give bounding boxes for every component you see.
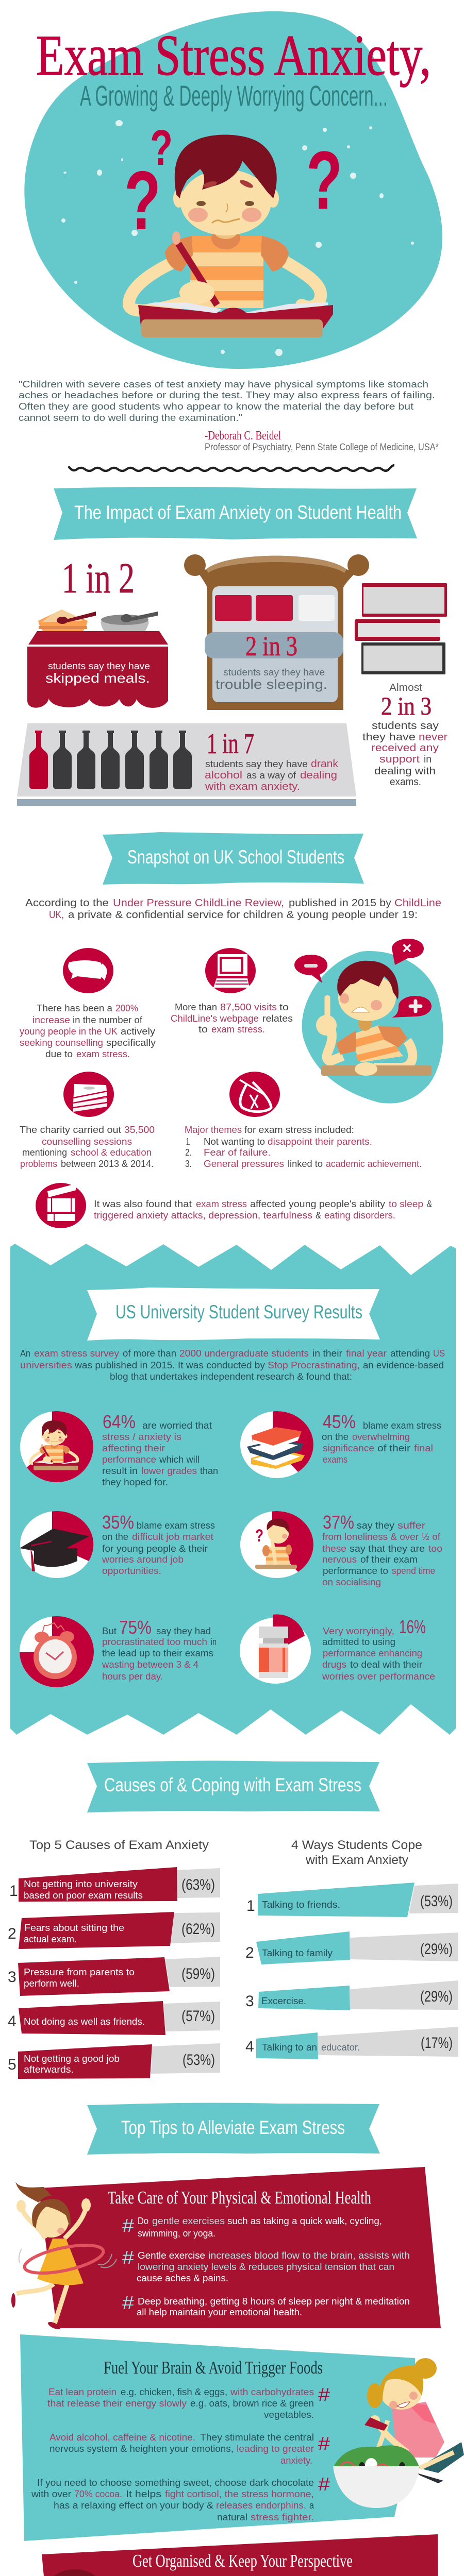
stat: 35,500 counselling sessions: The charity carried out <box>20 1125 121 1135</box>
tips text: increases blood flow to the brain, assists with <box>208 2250 410 2261</box>
coping 2: (29%) <box>420 1941 453 1958</box>
stat: 200% increase: specifically <box>106 1038 156 1048</box>
banner: snapshot on UK school students: Snapshot on UK School Students <box>127 846 344 868</box>
cause 2: Fears about sitting the <box>24 1923 124 1933</box>
tip bullets: # <box>122 2215 134 2236</box>
cause 2: actual exam. <box>24 1934 77 1944</box>
stat: 37% loneliness: suffer <box>397 1520 425 1531</box>
text: other effects of exam stress <box>94 1199 432 1221</box>
question marks: ? <box>150 120 173 176</box>
tips text: lowering anxiety levels & reduces physical tension that can <box>138 2262 394 2272</box>
icon: laptop <box>205 948 256 993</box>
cause 1: based on poor exam results <box>24 1890 143 1901</box>
illustration: girl with hula hoop <box>11 2182 117 2331</box>
stat: almost 2 in 3 no support: Almost <box>389 682 422 693</box>
coping 4 <box>245 2027 458 2059</box>
banner: causes and coping: Causes of & Coping with Exam Stress <box>104 1774 361 1795</box>
intro text: ChildLine review: a private & confidential service for children & young people under 19: <box>68 909 418 921</box>
panel: get organised <box>19 2534 439 2576</box>
stat text: 1 in 7 <box>207 728 254 760</box>
stat: 35,500 counselling sessions: between 2013 & 2014. <box>61 1159 154 1169</box>
stat: 64% worried: they hoped for. <box>102 1477 168 1487</box>
illustration: bed with trouble sleeping stat <box>184 554 369 710</box>
tips text: e.g. oats, brown rice & green <box>190 2398 314 2409</box>
illustration: stressed boy with speech bubbles <box>294 939 443 1104</box>
stat: 200% increase: seeking counselling <box>20 1038 103 1048</box>
survey intro: final year <box>346 1348 387 1359</box>
stat text: students say they have <box>205 759 308 769</box>
stat: almost 2 in 3 no support: 2 in 3 <box>381 691 432 720</box>
stat: 37% loneliness: performance to <box>323 1566 388 1576</box>
illustration: table with skipped meals stat: students say they have <box>48 661 150 671</box>
list: major themes: General pressures <box>204 1159 284 1169</box>
tips text: e.g. chicken, fish & eggs, <box>121 2387 227 2397</box>
stat: 75% procrastinated: procrastinated too much <box>102 1637 207 1647</box>
list: major themes: 2. <box>185 1147 192 1158</box>
illustration: table with skipped meals stat: skipped meals. <box>45 670 150 686</box>
list: major themes: Not wanting to <box>204 1137 265 1147</box>
list: major themes: Major themes <box>185 1125 242 1135</box>
tips text: Do <box>138 2216 148 2226</box>
survey intro: Stop Procrastinating, <box>268 1360 360 1370</box>
illustration: smiling boy pointing <box>19 2569 129 2576</box>
stat: almost 2 in 3 no support: never <box>419 732 448 743</box>
heading: top 5 causes: Top 5 Causes of Exam Anxiety <box>29 1838 209 1852</box>
intro text: ChildLine review: published in 2015 by <box>289 897 391 909</box>
illustration: bed with trouble sleeping stat: students say they have <box>223 667 325 677</box>
quote: aches or headaches before or during the test. They may also express fears of failing. <box>19 390 435 400</box>
tips text: Deep breathing, getting 8 hours of sleep per night & meditation <box>138 2296 410 2307</box>
tip bullets: # <box>318 2433 330 2454</box>
coping 4: (17%) <box>421 2035 453 2052</box>
cause 5 <box>8 2043 220 2079</box>
heading: Get Organised & Keep Your Perspective <box>132 2551 353 2571</box>
tips text: with carbohydrates <box>230 2387 314 2397</box>
stat: 87,500 visits: to <box>279 1002 289 1012</box>
stat: 200% increase: increase <box>32 1015 70 1025</box>
stat: 16% drugs: admitted to using <box>322 1637 395 1647</box>
stat: 35,500 counselling sessions: problems <box>20 1159 57 1169</box>
stat: 75% procrastinated <box>102 1617 217 1682</box>
stat: 16% drugs: worries over performance <box>322 1671 435 1682</box>
stat: 35,500 counselling sessions: counselling sessions <box>42 1137 132 1147</box>
heading: Take Care of Your Physical & Emotional Health <box>108 2188 371 2208</box>
survey intro: in their <box>312 1348 342 1359</box>
coping 3 <box>245 1980 458 2010</box>
stat: 45% blame: final <box>414 1443 433 1453</box>
list: major themes: disappoint their parents. <box>268 1137 372 1147</box>
tip bullets: # <box>122 2292 134 2313</box>
stat: 87,500 visits: More than <box>175 1002 217 1012</box>
survey intro: attending <box>390 1348 430 1359</box>
stat: 87,500 visits: 87,500 visits <box>220 1002 277 1012</box>
stat: 45% blame: blame exam stress <box>363 1420 441 1431</box>
pie: 37% with thinking boy: ? <box>255 1526 263 1546</box>
stat: 45% blame: exams <box>323 1454 347 1465</box>
stat: almost 2 in 3 no support: students say <box>372 720 439 732</box>
icon: no failure grade <box>229 1072 280 1117</box>
stat: 75% procrastinated: say they had <box>156 1626 211 1636</box>
list: major themes: linked to <box>288 1159 323 1169</box>
survey intro: an evidence-based <box>363 1360 444 1370</box>
stat: 35,500 counselling sessions: 35,500 <box>124 1125 155 1135</box>
pie: 16% with pill bottle <box>240 1614 311 1684</box>
cause 3 <box>8 1957 220 1996</box>
stat: 35,500 counselling sessions: school & education <box>71 1147 152 1158</box>
stat: 75% procrastinated: hours per day. <box>102 1671 163 1682</box>
list: major themes: for exam stress included: <box>244 1125 354 1135</box>
banner: top tips <box>87 2103 380 2155</box>
icon: books <box>36 1183 86 1228</box>
speech bubbles <box>294 939 432 1018</box>
stat: almost 2 in 3 no support: received any <box>371 742 439 754</box>
tips text: has a relaxing effect on your body & <box>54 2500 213 2511</box>
stat: 37% loneliness: these <box>322 1544 346 1554</box>
stat: 35% job market: opportunities. <box>102 1566 161 1576</box>
text: other effects of exam stress: to sleep <box>389 1199 423 1209</box>
stat: 35% job market: for young people & their <box>102 1544 208 1554</box>
banner: causes and coping <box>87 1761 380 1812</box>
stat: 200% increase: 200% <box>115 1003 138 1013</box>
tips text: all help maintain your emotional health. <box>137 2307 302 2317</box>
text: other effects of exam stress: eating disorders. <box>324 1210 395 1221</box>
stat: 200% increase: exam stress. <box>76 1049 130 1059</box>
stat: 37% loneliness: 37% <box>323 1512 354 1533</box>
survey intro: An <box>20 1348 30 1359</box>
tip bullets <box>318 2384 330 2495</box>
coping 1: (53%) <box>420 1893 453 1910</box>
tips text: a <box>309 2500 314 2511</box>
heading: Fuel Your Brain & Avoid Trigger Foods <box>104 2358 323 2378</box>
survey intro: exam stress survey <box>34 1348 119 1359</box>
stat: 35% job market: on the <box>102 1532 128 1542</box>
tips text <box>137 2216 410 2317</box>
stat: 64% worried <box>102 1411 218 1487</box>
cause 5: Not getting a good job <box>24 2054 120 2064</box>
stat: almost 2 in 3 no support: they have <box>362 732 416 743</box>
stat text: alcohol <box>205 770 242 781</box>
stat: 64% worried: result in <box>102 1466 138 1476</box>
stat: 75% procrastinated: the lead up to their exams <box>102 1648 213 1658</box>
coping 1: 1 <box>246 1897 255 1914</box>
tips text: gentle exercises <box>152 2216 225 2226</box>
tips text: 70% cocoa. <box>74 2489 122 2499</box>
stat: 200% increase <box>20 1003 156 1059</box>
stat: 200% increase: actively <box>121 1026 155 1037</box>
stat: 37% loneliness: say they <box>357 1520 394 1531</box>
stat: 16% drugs: performance enhancing <box>323 1648 422 1658</box>
stat: 75% procrastinated: But <box>102 1626 117 1636</box>
hero teal blob <box>24 11 442 369</box>
illustration: bed with trouble sleeping stat: 2 in 3 <box>245 631 297 662</box>
heading: 4 ways to cope: 4 Ways Students Cope <box>291 1838 422 1852</box>
stat: almost 2 in 3 no support: support <box>379 754 420 765</box>
cause 2: 2 <box>8 1925 16 1942</box>
stat: 87,500 visits <box>171 1002 293 1035</box>
tips text: cause aches & pains. <box>137 2273 228 2283</box>
stat: 45% blame: on the <box>322 1432 349 1442</box>
illustration: table with skipped meals stat <box>27 631 168 708</box>
pie: 45% <box>240 1411 313 1478</box>
stat: 87,500 visits: to <box>198 1024 208 1035</box>
stat: 200% increase: due to <box>45 1049 73 1059</box>
cause 3: 3 <box>8 1969 16 1986</box>
panel: physical and emotional health <box>11 2167 441 2331</box>
stat: 45% blame: of their <box>377 1443 410 1453</box>
coping 3: 3 <box>245 1993 254 2010</box>
stat: 37% loneliness: from loneliness & over ½ of <box>322 1532 441 1542</box>
banner: snapshot on UK school students <box>103 832 364 885</box>
stat: 87,500 visits: exam stress. <box>211 1024 265 1035</box>
list: major themes: 1. <box>186 1137 190 1147</box>
illustration: worried boy writing in a book <box>129 135 333 337</box>
tips text: If you need to choose something sweet, choose dark chocolate <box>37 2478 314 2488</box>
list: major themes <box>185 1125 422 1169</box>
coping 4: Talking to an <box>262 2042 317 2053</box>
text: other effects of exam stress: & <box>427 1199 432 1209</box>
bar chart: 4 ways students cope <box>245 1883 458 2059</box>
tips text: natural <box>217 2512 247 2522</box>
cause 1 <box>9 1867 220 1902</box>
survey intro: blog that undertakes independent research & found that: <box>110 1371 352 1382</box>
stat: 64% worried: lower grades <box>141 1466 197 1476</box>
coping 1 <box>246 1883 458 1917</box>
tips text: that release their energy slowly <box>47 2398 187 2409</box>
list: major themes: academic achievement. <box>326 1159 422 1169</box>
stat: 35,500 counselling sessions: mentioning <box>22 1147 67 1158</box>
intro text: ChildLine review: Under Pressure ChildLine Review, <box>113 897 284 909</box>
stat: 16% drugs: drugs <box>322 1659 346 1670</box>
stat: 37% loneliness: nervous <box>322 1554 357 1565</box>
stat: 35% job market: 35% <box>102 1512 134 1533</box>
tips text: vegetables. <box>264 2410 314 2420</box>
cause 1: (63%) <box>181 1876 215 1893</box>
tips text: Avoid alcohol, caffeine & nicotine. <box>49 2432 195 2443</box>
stat: 87,500 visits: ChildLine's webpage <box>171 1013 259 1024</box>
stat: 75% procrastinated: 75% <box>119 1617 152 1638</box>
quote: Often they are good students who appear to know the material the day before but <box>19 401 413 412</box>
stat: 64% worried: 64% <box>103 1411 136 1432</box>
stat: 37% loneliness: on socialising <box>322 1577 381 1587</box>
stat: 37% loneliness: too <box>428 1544 442 1554</box>
tips text <box>31 2387 314 2522</box>
illustration: book stack <box>355 583 447 674</box>
bottles <box>29 731 192 789</box>
tips text: such as taking a quick walk, cycling, <box>227 2216 382 2226</box>
cause 1: Not getting into university <box>24 1879 138 1889</box>
stat: 45% blame: overwhelming <box>352 1432 410 1442</box>
panel: fuel your brain <box>20 2334 464 2541</box>
survey intro: was published in 2015. It was conducted by <box>74 1360 265 1370</box>
coping 3: Excercise. <box>261 1996 306 2006</box>
tips text: Eat lean protein <box>48 2387 117 2397</box>
stat: 16% drugs: to deal with their <box>350 1659 422 1670</box>
text: other effects of exam stress: & <box>316 1210 321 1221</box>
question marks: ? <box>124 154 161 247</box>
pie: 75% with alarm clock <box>20 1616 94 1687</box>
panel: US university survey <box>10 1244 456 1735</box>
cause 5: (53%) <box>183 2052 215 2069</box>
stat: 16% drugs: 16% <box>399 1616 426 1637</box>
tip bullets: # <box>318 2473 330 2495</box>
text: other effects of exam stress: triggered anxiety attacks, depression, tearfulness <box>94 1210 312 1221</box>
stat: almost 2 in 3 no support: dealing with <box>374 766 436 777</box>
illustration: bowls <box>38 609 158 640</box>
cause 4: 4 <box>8 2013 16 2030</box>
banner: top tips: Top Tips to Alleviate Exam Stress <box>121 2117 345 2138</box>
tips text: releases endorphins, <box>216 2500 306 2511</box>
quote: cannot seem to do well during the examination." <box>19 413 242 423</box>
tips text: It helps <box>126 2489 161 2499</box>
stat: 16% drugs: Very worryingly, <box>323 1626 394 1636</box>
intro text: ChildLine review: ChildLine <box>394 897 441 909</box>
stat: 64% worried: performance <box>102 1454 156 1465</box>
list: major themes: Fear of failure. <box>204 1147 271 1158</box>
stat: 37% loneliness: spend time <box>392 1566 435 1576</box>
tips text: fight cortisol, the stress hormone, <box>165 2489 314 2499</box>
tip bullets <box>122 2215 134 2313</box>
tips text: Gentle exercise <box>138 2250 205 2261</box>
stat: almost 2 in 3 no support <box>362 682 448 788</box>
stat: 35% job market: worries around job <box>102 1554 184 1565</box>
tips text: leading to greater <box>237 2444 314 2454</box>
stat: 200% increase: There has been a <box>37 1003 113 1013</box>
coping 2: Talking to family <box>262 1948 333 1958</box>
text: other effects of exam stress: exam stress <box>196 1199 247 1209</box>
stat: 45% blame: significance <box>323 1443 374 1453</box>
cause 5: afterwards. <box>24 2064 74 2075</box>
quote <box>19 379 435 423</box>
icon: chat bubbles <box>63 948 113 993</box>
stat: 45% blame: 45% <box>323 1411 356 1432</box>
pie: 37% with thinking boy <box>240 1511 313 1578</box>
squiggle divider <box>69 465 394 471</box>
stat: 64% worried: which will <box>159 1454 200 1465</box>
survey intro: 2000 undergraduate students <box>179 1348 309 1359</box>
tips text: anxiety. <box>280 2455 312 2466</box>
question marks: ? <box>306 134 342 226</box>
cause 1: 1 <box>9 1883 18 1900</box>
icon: paper stack <box>63 1072 114 1117</box>
survey intro: US <box>433 1348 445 1359</box>
stat: 35% job market: difficult job market <box>132 1532 213 1542</box>
cause 2: (62%) <box>181 1921 215 1938</box>
banner: impact of exam anxiety <box>54 487 417 540</box>
quote attribution: -Deborah C. Beidel <box>205 429 281 443</box>
text: other effects of exam stress: affected young people's ability <box>250 1199 385 1209</box>
survey intro: universities <box>20 1360 72 1370</box>
cause 4 <box>8 2001 220 2035</box>
survey intro <box>20 1348 445 1382</box>
cause 2 <box>8 1912 220 1949</box>
illustration: stressed boy with speech bubbles: × <box>402 939 412 957</box>
tips text: stress fighter. <box>251 2512 314 2522</box>
stat: 64% worried: affecting their <box>102 1443 165 1453</box>
stat: 35% job market: blame exam stress <box>137 1520 215 1531</box>
tips text: with over <box>31 2489 71 2499</box>
banner: impact of exam anxiety: The Impact of Exam Anxiety on Student Health <box>74 502 402 523</box>
text: other effects of exam stress: It was also found that <box>94 1199 192 1209</box>
tips text: swimming, or yoga. <box>138 2228 216 2239</box>
heading: 4 ways to cope: with Exam Anxiety <box>305 1853 408 1867</box>
illustration: girl with salad bowl <box>333 2358 464 2508</box>
tip bullets: # <box>318 2384 330 2405</box>
stat: 35,500 counselling sessions <box>20 1125 155 1169</box>
stat: 75% procrastinated: in <box>211 1637 217 1647</box>
stat: almost 2 in 3 no support: in <box>424 754 432 765</box>
bar chart: top 5 causes <box>8 1867 220 2079</box>
stat: almost 2 in 3 no support: exams. <box>390 776 421 788</box>
stat: 64% worried: than <box>200 1466 218 1476</box>
cause 5: 5 <box>8 2056 16 2073</box>
pie: 35% with graduation cap <box>20 1511 93 1578</box>
stat: 64% worried: stress / anxiety is <box>102 1432 181 1442</box>
intro text: ChildLine review: According to the <box>25 897 109 909</box>
coping 2 <box>245 1931 458 1964</box>
quote: "Children with severe cases of test anxiety may have physical symptoms like stomach <box>19 379 428 389</box>
stat: 1 in 2: 1 in 2 <box>62 554 135 602</box>
stat: 45% blame <box>322 1411 441 1465</box>
stat: 37% loneliness: say that they are <box>350 1544 425 1554</box>
cause 3: Pressure from parents to <box>24 1967 135 1977</box>
stat: 37% loneliness: of their exam <box>360 1554 418 1565</box>
coping 4: educator. <box>321 2042 360 2053</box>
stat: 16% drugs <box>322 1616 435 1682</box>
stat text: with exam anxiety. <box>205 781 300 792</box>
tip bullets: # <box>122 2247 134 2268</box>
stat: 37% loneliness <box>322 1512 442 1587</box>
stat: 35% job market <box>102 1512 215 1576</box>
stat: 200% increase: young people in the UK <box>20 1026 118 1037</box>
shelf with bottles: 1 in 7 <box>17 723 356 806</box>
cause 3: perform well. <box>24 1978 79 1989</box>
stat: 87,500 visits: relates <box>262 1013 293 1024</box>
quote attribution <box>205 429 439 453</box>
stat text: as a way of <box>246 770 296 781</box>
tips text: They stimulate the central <box>200 2432 314 2443</box>
banner: US university student survey results <box>87 1287 380 1341</box>
banner: US university student survey results: US University Student Survey Results <box>115 1301 362 1323</box>
cause 4: (57%) <box>181 2008 215 2025</box>
question marks <box>124 120 342 247</box>
stat: 200% increase: in the number of <box>73 1015 143 1025</box>
coping 4: 4 <box>245 2038 254 2055</box>
pie: 64% <box>20 1411 93 1482</box>
stat text: drank <box>311 758 339 770</box>
stat: 75% procrastinated: wasting between 3 & 4 <box>102 1659 198 1670</box>
cause 3: (59%) <box>181 1965 215 1982</box>
coping 2: 2 <box>245 1944 254 1961</box>
stat text <box>205 728 339 792</box>
cause 4: Not doing as well as friends. <box>24 2016 145 2027</box>
intro text: ChildLine review <box>25 897 441 921</box>
stat text: dealing <box>300 770 337 781</box>
illustration: bed with trouble sleeping stat: trouble sleeping. <box>216 676 327 692</box>
coping 3: (29%) <box>420 1988 453 2005</box>
list: major themes: 3. <box>185 1159 192 1169</box>
tips text: nervous system & heighten your emotions, <box>49 2444 234 2454</box>
heading: 4 ways to cope <box>291 1838 422 1867</box>
stat: 64% worried: are worried that <box>142 1420 212 1431</box>
survey intro: of more than <box>123 1348 176 1359</box>
coping 1: Talking to friends. <box>262 1900 340 1910</box>
intro text: ChildLine review: UK, <box>49 909 64 921</box>
